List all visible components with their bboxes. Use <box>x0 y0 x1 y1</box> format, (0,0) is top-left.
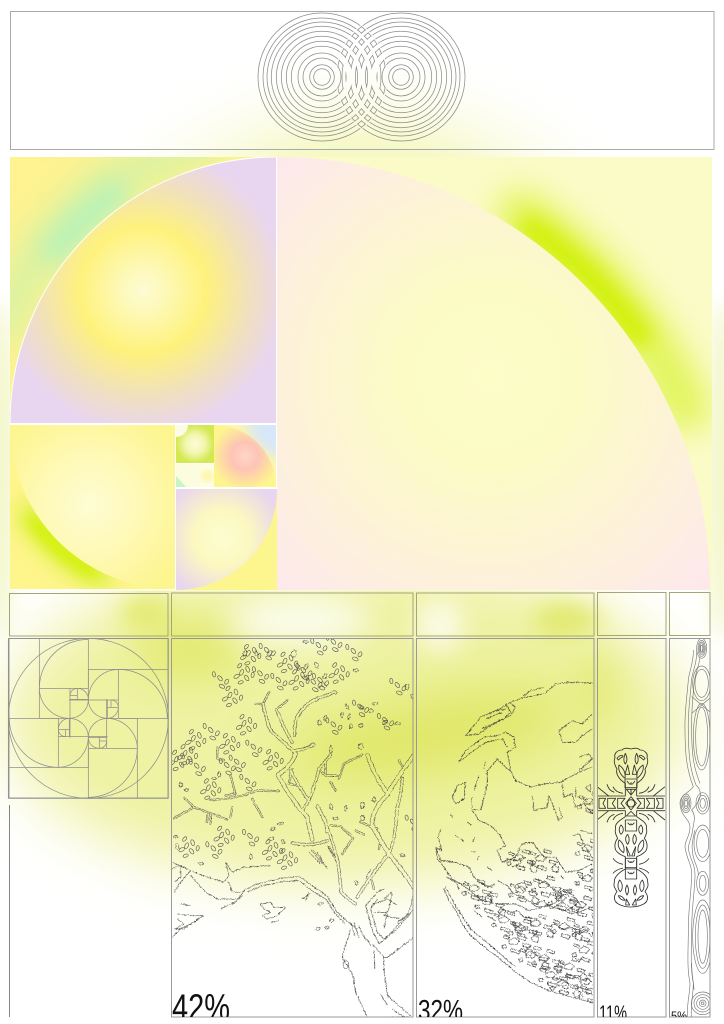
top panel with interlaced rings <box>10 12 714 150</box>
lilac quarter circle square <box>3 143 276 423</box>
contour strip panel <box>670 638 714 1023</box>
big quarter circle square <box>277 157 710 590</box>
pink small square <box>214 425 276 487</box>
icon: interlaced double circle knot <box>258 13 465 141</box>
globe panel <box>416 638 608 1024</box>
lower glow <box>5 555 685 885</box>
icon: ornamental cross <box>597 748 665 907</box>
lilac small square <box>176 489 277 590</box>
left lower box: nested fibonacci spirals <box>8 638 168 798</box>
header boxes row <box>10 592 710 636</box>
globe line drawing <box>435 682 608 1005</box>
icon: contour lines <box>680 639 710 1017</box>
icon: four-fold golden spiral <box>8 638 168 798</box>
cross panel <box>597 638 666 1024</box>
tree panel <box>168 635 422 1024</box>
yellow quarter circle square <box>10 425 175 589</box>
value 5%: 5% <box>671 1009 687 1023</box>
tree line drawing <box>168 635 422 1017</box>
panel: golden ratio squares <box>3 143 712 590</box>
lime tiny square <box>176 425 214 487</box>
